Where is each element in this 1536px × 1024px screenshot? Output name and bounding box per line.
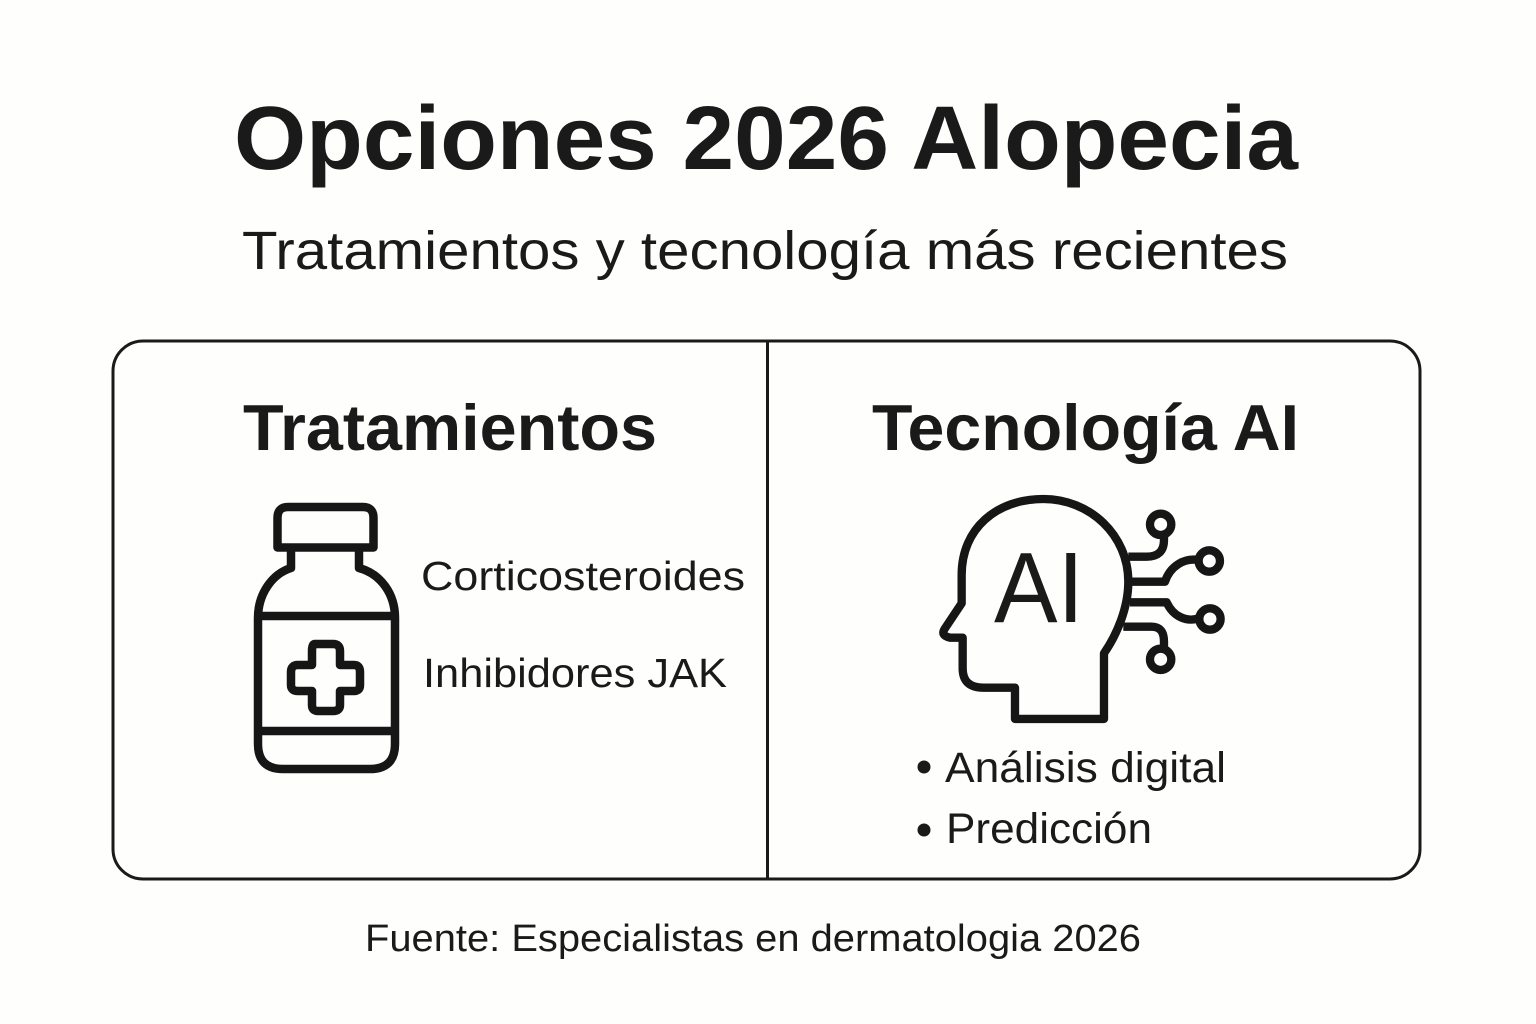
panel: AI technology xyxy=(872,391,1299,853)
label: JAK inhibitors: Inhibidores JAK xyxy=(423,650,727,696)
icon text: AI: AI xyxy=(994,532,1084,644)
bullet: digital analysis: Análisis digital xyxy=(945,744,1226,792)
panel: treatments xyxy=(243,391,745,769)
panel: comparison frame xyxy=(113,341,1420,879)
title: Opciones 2026 Alopecia xyxy=(234,89,1299,189)
label: corticosteroids: Corticosteroides xyxy=(421,553,745,599)
head outline xyxy=(943,499,1221,719)
heading: treatments: Tratamientos xyxy=(243,391,657,464)
bullet: prediction: Predicción xyxy=(946,805,1152,853)
bullet list xyxy=(918,744,1226,853)
icon: medicine bottle xyxy=(258,507,395,769)
source note: Fuente: Especialistas en dermatologia 2026 xyxy=(365,918,1141,960)
icon: AI head with circuits xyxy=(943,499,1221,719)
subtitle: Tratamientos y tecnología más recientes xyxy=(242,221,1288,281)
heading: AI technology: Tecnología AI xyxy=(872,391,1299,464)
